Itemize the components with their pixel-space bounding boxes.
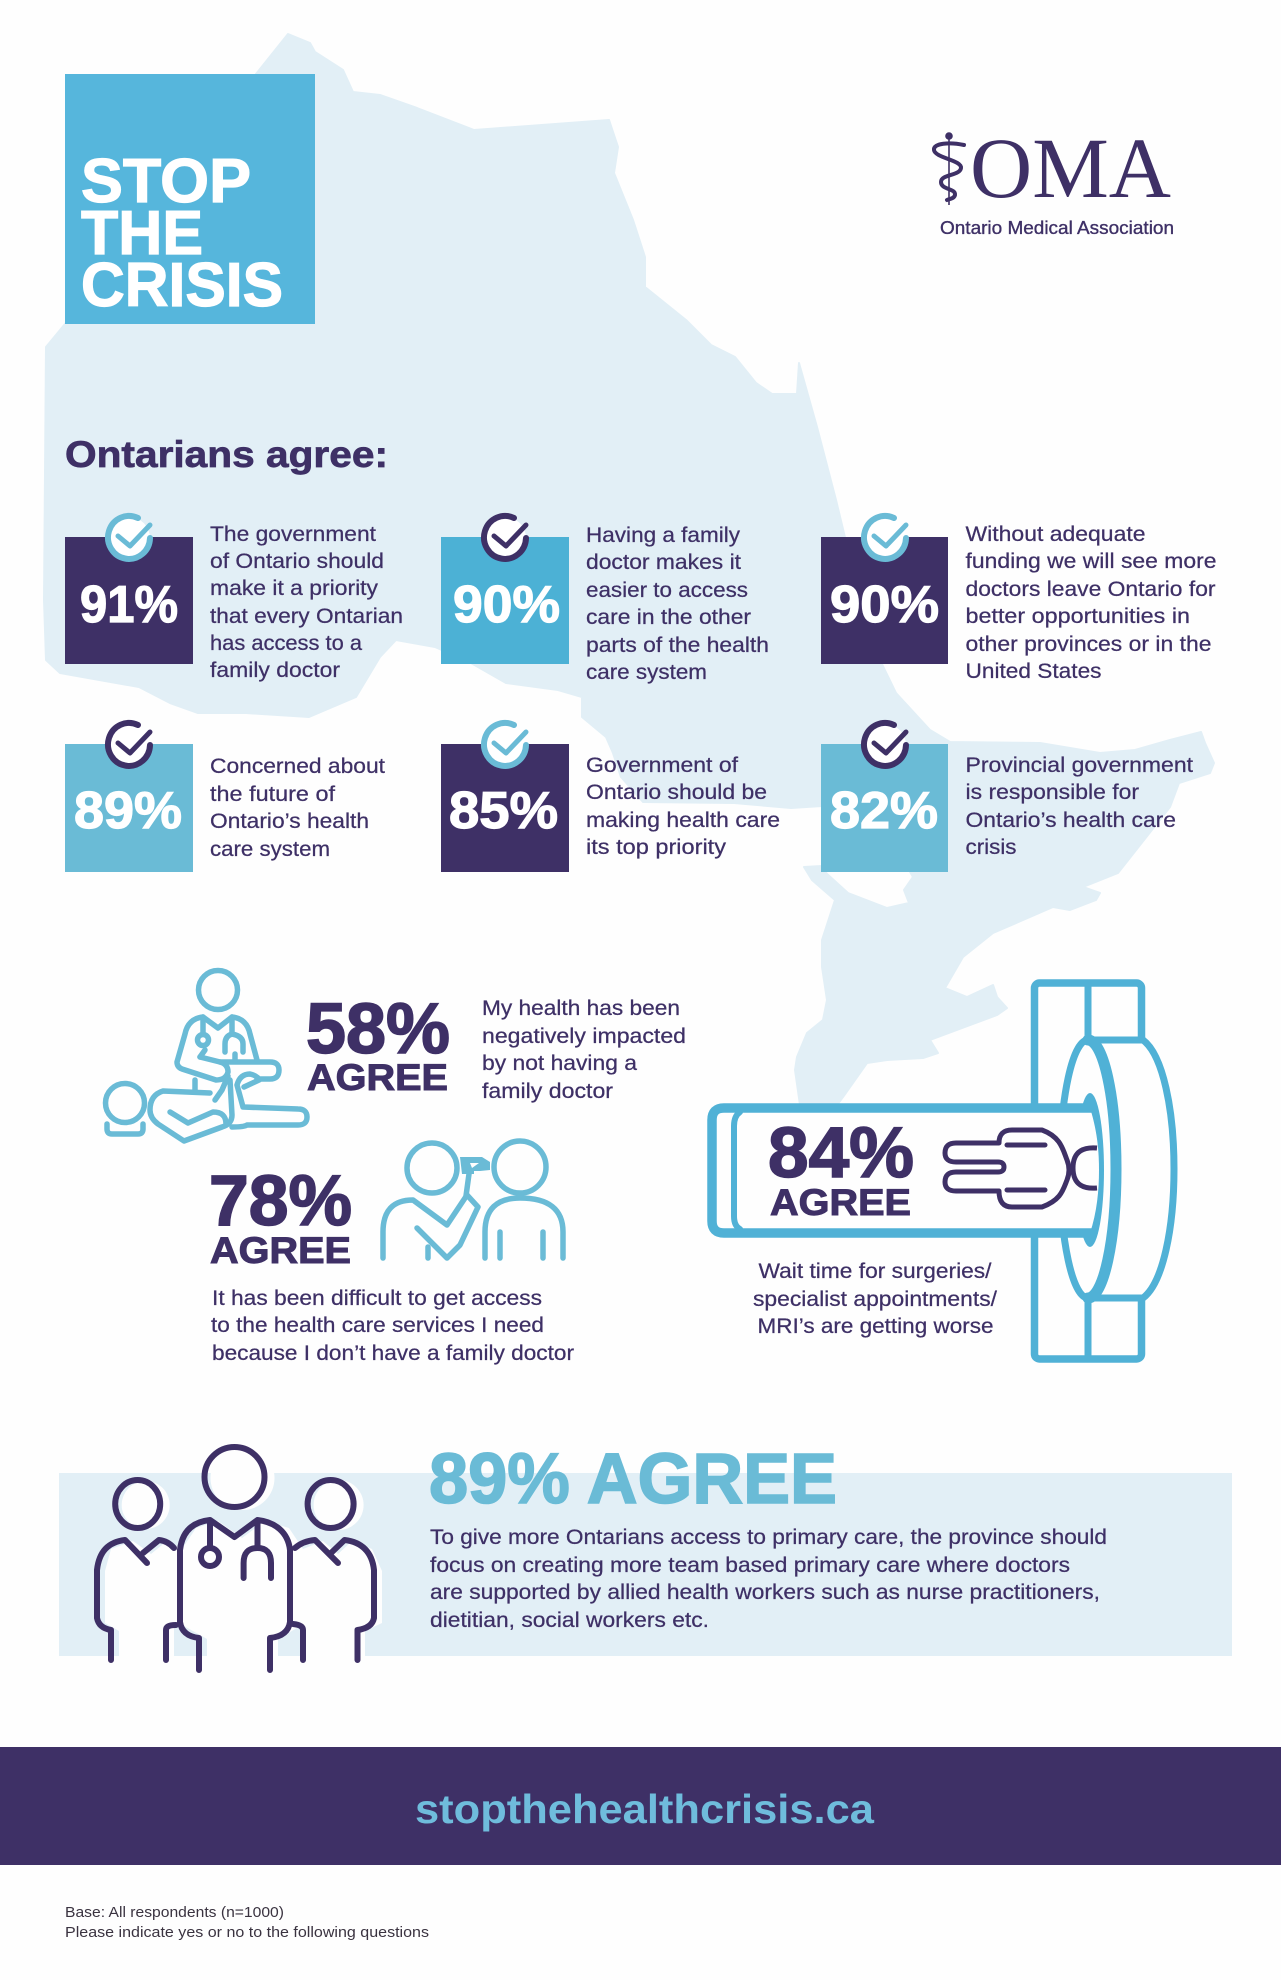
title box: Stop the Crisis bbox=[65, 74, 315, 324]
stat card: 89% concerned: the future of bbox=[210, 782, 335, 806]
stat card: 82% responsible: Ontario’s health care bbox=[966, 808, 1176, 832]
stat card: 90% funding: 90% bbox=[830, 576, 939, 634]
text: team based primary care bbox=[430, 1525, 1107, 1632]
stat card: 90% funding: doctors leave Ontario for bbox=[966, 577, 1216, 601]
stat: 78% agree: AGREE bbox=[210, 1230, 351, 1271]
stat card: 90% funding: better opportunities in bbox=[966, 604, 1190, 628]
stat card: 90% family doctor: care in the other bbox=[586, 605, 751, 629]
OMA logo: Ontario Medical Association bbox=[940, 218, 1174, 238]
stat card: 85% top priority bbox=[441, 723, 780, 872]
stat card: 85% top priority: Ontario should be bbox=[586, 780, 767, 804]
map of Ontario bbox=[44, 34, 1214, 1105]
stat card: 90% funding: other provinces or in the bbox=[966, 632, 1212, 656]
footer band with website bbox=[0, 1747, 1281, 1865]
stat card: 91%: of Ontario should bbox=[210, 549, 384, 573]
stat card: 82% responsible: Provincial government bbox=[966, 753, 1193, 777]
stat card: 90% funding: Without adequate bbox=[966, 522, 1146, 546]
stat card: 85% top priority: Government of bbox=[586, 753, 738, 777]
OMA logo bbox=[934, 120, 1174, 238]
stat card: 82% responsible: is responsible for bbox=[966, 780, 1139, 804]
stat card: 91%: make it a priority bbox=[210, 576, 378, 600]
title box: Stop the Crisis: STOP bbox=[81, 147, 251, 216]
text: difficult to get access bbox=[211, 1286, 574, 1365]
title box: Stop the Crisis: THE bbox=[81, 199, 203, 268]
stat card: 85% top priority: making health care bbox=[586, 808, 780, 832]
text: difficult to get access: because I don’t have a family doctor bbox=[212, 1341, 574, 1365]
stat card: 90% family doctor: parts of the health bbox=[586, 633, 769, 657]
footer band with website: stopthehealthcrisis.ca bbox=[415, 1786, 875, 1832]
stat card: 90% family doctor: doctor makes it bbox=[586, 550, 741, 574]
footnote: Base: All respondents (n=1000) bbox=[65, 1904, 284, 1921]
stat card: 90% funding: funding we will see more bbox=[966, 549, 1216, 573]
text: health negatively impacted: negatively impacted bbox=[482, 1024, 686, 1048]
icon: doctor examining patient with otoscope bbox=[383, 1141, 563, 1258]
stat: 84% agree: 84% bbox=[768, 1114, 914, 1193]
text: wait times getting worse: specialist appointments/ bbox=[753, 1287, 997, 1311]
stat card: 82% responsible: crisis bbox=[966, 835, 1016, 859]
stat card: 89% concerned: Concerned about bbox=[210, 754, 385, 778]
stat card: 89% concerned: 89% bbox=[74, 782, 182, 840]
stat card: 91%: has access to a bbox=[210, 631, 362, 655]
stat card: 90% family doctor: Having a family bbox=[586, 523, 740, 547]
footnote: Please indicate yes or no to the following questions bbox=[65, 1924, 429, 1941]
OMA logo: OMA bbox=[970, 120, 1171, 216]
text: difficult to get access: It has been difficult to get access bbox=[212, 1286, 542, 1310]
stat: 84% agree: AGREE bbox=[770, 1182, 911, 1223]
title box: Stop the Crisis: CRISIS bbox=[81, 251, 283, 320]
text: wait times getting worse: MRI’s are getting worse bbox=[758, 1314, 994, 1338]
icon: team of three health workers bbox=[97, 1446, 382, 1671]
text: difficult to get access: to the health care services I need bbox=[211, 1313, 544, 1337]
stat card: 91%: The government bbox=[210, 522, 376, 546]
stat card: 89% concerned: Ontario’s health bbox=[210, 809, 369, 833]
stat card: 82% responsible bbox=[821, 723, 1193, 872]
footnote bbox=[65, 1904, 429, 1941]
heading: 89% agree: 89% AGREE bbox=[429, 1440, 837, 1519]
stat: 58% agree: AGREE bbox=[307, 1057, 448, 1098]
stat: 58% agree: 58% bbox=[306, 990, 450, 1069]
stat card: 85% top priority: 85% bbox=[449, 782, 558, 840]
stat card: 91%: that every Ontarian bbox=[210, 604, 403, 628]
stat card: 90% family doctor: 90% bbox=[453, 576, 560, 634]
stat card: 89% concerned: care system bbox=[210, 837, 330, 861]
text: health negatively impacted bbox=[482, 996, 686, 1103]
stat card: 89% concerned bbox=[65, 723, 385, 872]
text: team based primary care: dietitian, social workers etc. bbox=[430, 1608, 709, 1632]
stat card: 90% family doctor: easier to access bbox=[586, 578, 748, 602]
icon: MRI scanner with patient bbox=[712, 983, 1174, 1359]
heading: Ontarians agree: Ontarians agree: bbox=[65, 434, 388, 475]
stat card: 90% family doctor bbox=[441, 516, 769, 684]
stat: 78% agree: 78% bbox=[209, 1162, 352, 1241]
stat card: 85% top priority: its top priority bbox=[586, 835, 726, 859]
stat card: 90% family doctor: care system bbox=[586, 660, 707, 684]
stat card: 91%: family doctor bbox=[210, 658, 340, 682]
text: wait times getting worse: Wait time for surgeries/ bbox=[758, 1259, 992, 1283]
text: wait times getting worse bbox=[753, 1259, 997, 1338]
text: health negatively impacted: by not having a bbox=[482, 1051, 637, 1075]
stat card: 90% funding bbox=[821, 516, 1216, 683]
text: team based primary care: To give more Ontarians access to primary care, the province should bbox=[430, 1525, 1107, 1549]
stat card: 90% funding: United States bbox=[966, 659, 1102, 683]
text: health negatively impacted: My health has been bbox=[482, 996, 680, 1020]
text: team based primary care: are supported by allied health workers such as nurse practitioners, bbox=[430, 1580, 1100, 1604]
icon: doctor treating patient bbox=[106, 970, 307, 1141]
stat card: 82% responsible: 82% bbox=[830, 782, 938, 840]
stat card: 91%: 91% bbox=[80, 576, 178, 634]
text: health negatively impacted: family doctor bbox=[482, 1079, 613, 1103]
stat card: 91% bbox=[65, 516, 403, 682]
panel: team based care bbox=[59, 1440, 1232, 1671]
text: team based primary care: focus on creating more team based primary care where doctors bbox=[430, 1553, 1070, 1577]
